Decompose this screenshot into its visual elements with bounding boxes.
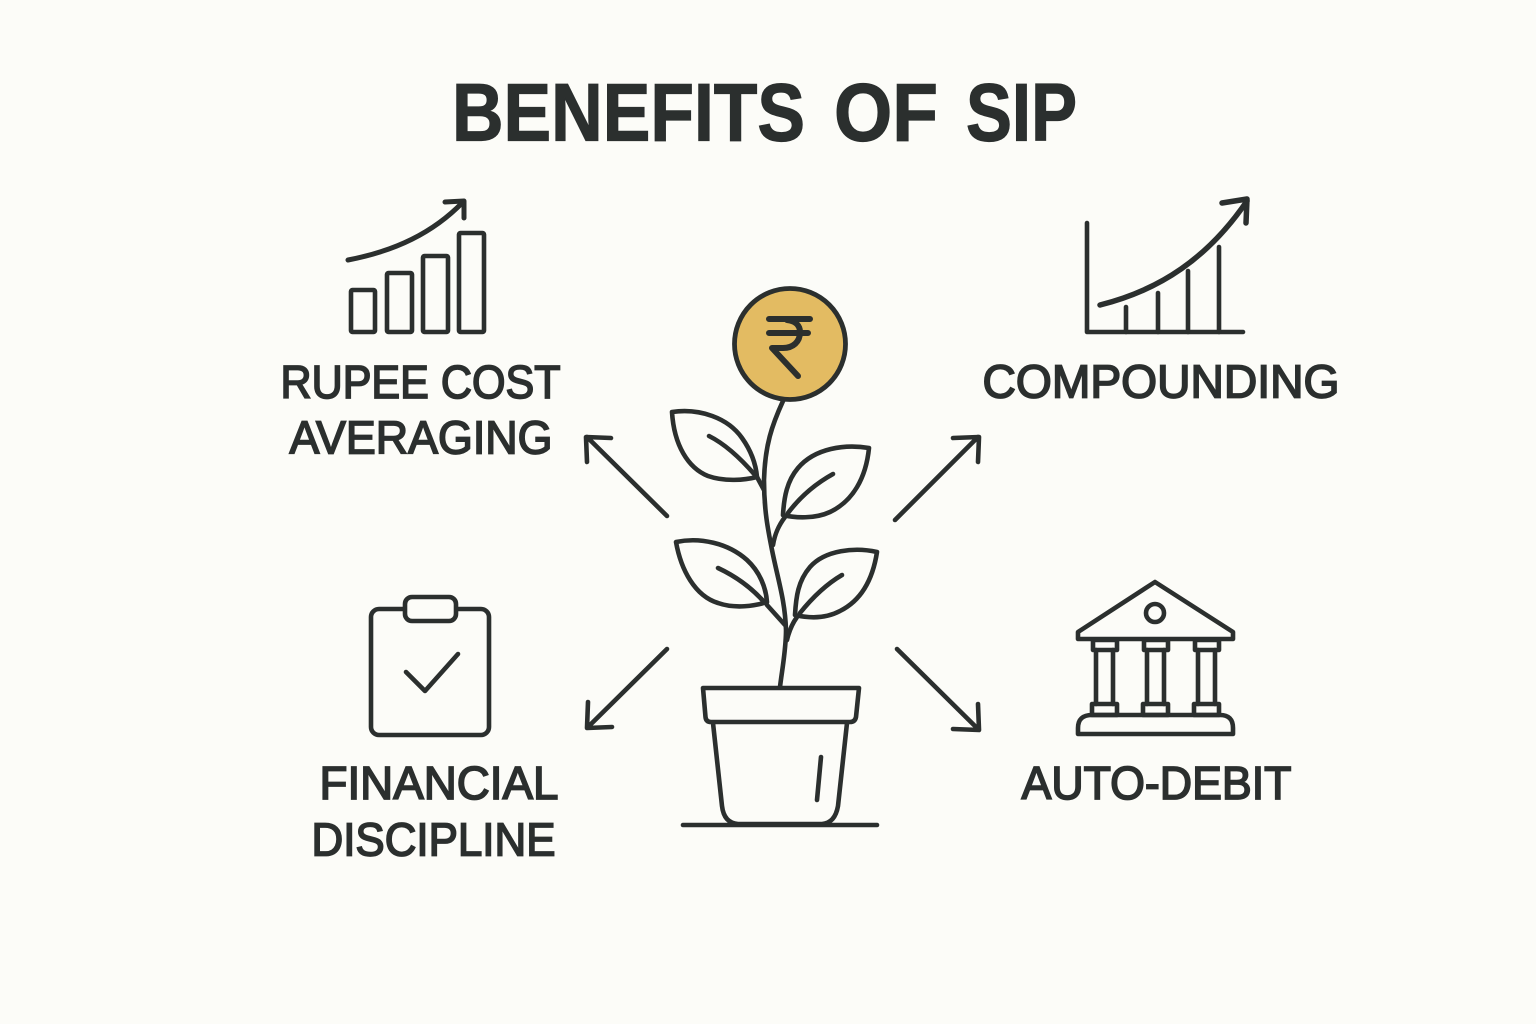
label: financial discipline	[312, 757, 558, 866]
label: rupee cost averaging	[280, 356, 560, 464]
icon: bank building	[1078, 582, 1233, 734]
leaf: lower right	[787, 550, 877, 640]
arrow: to rupee cost averaging	[586, 437, 667, 516]
title	[452, 68, 1077, 158]
label: auto-debit: AUTO-DEBIT	[1022, 757, 1292, 809]
label: rupee cost averaging: AVERAGING	[290, 412, 552, 464]
leaf: lower left	[676, 540, 785, 625]
leaf: upper left	[672, 411, 764, 490]
icon: rupee coin	[734, 288, 846, 400]
arrow: to compounding	[895, 437, 979, 520]
title: SIP	[966, 68, 1077, 158]
stem	[764, 401, 786, 687]
icon: clipboard with check	[371, 597, 489, 735]
label: compounding: COMPOUNDING	[982, 356, 1340, 408]
title: OF	[834, 68, 938, 158]
central plant illustration	[672, 288, 877, 825]
arrow: to auto-debit	[897, 649, 979, 730]
icon: rupee cost averaging bar chart	[348, 201, 484, 332]
title: BENEFITS	[452, 68, 805, 158]
flower pot	[683, 688, 877, 825]
label: financial discipline: FINANCIAL	[320, 757, 558, 809]
icon: compounding growth chart	[1087, 199, 1247, 332]
leaf: upper right	[773, 447, 869, 545]
label: rupee cost averaging: RUPEE COST	[280, 356, 560, 408]
arrow: to financial discipline	[587, 649, 667, 728]
label: financial discipline: DISCIPLINE	[312, 814, 556, 866]
